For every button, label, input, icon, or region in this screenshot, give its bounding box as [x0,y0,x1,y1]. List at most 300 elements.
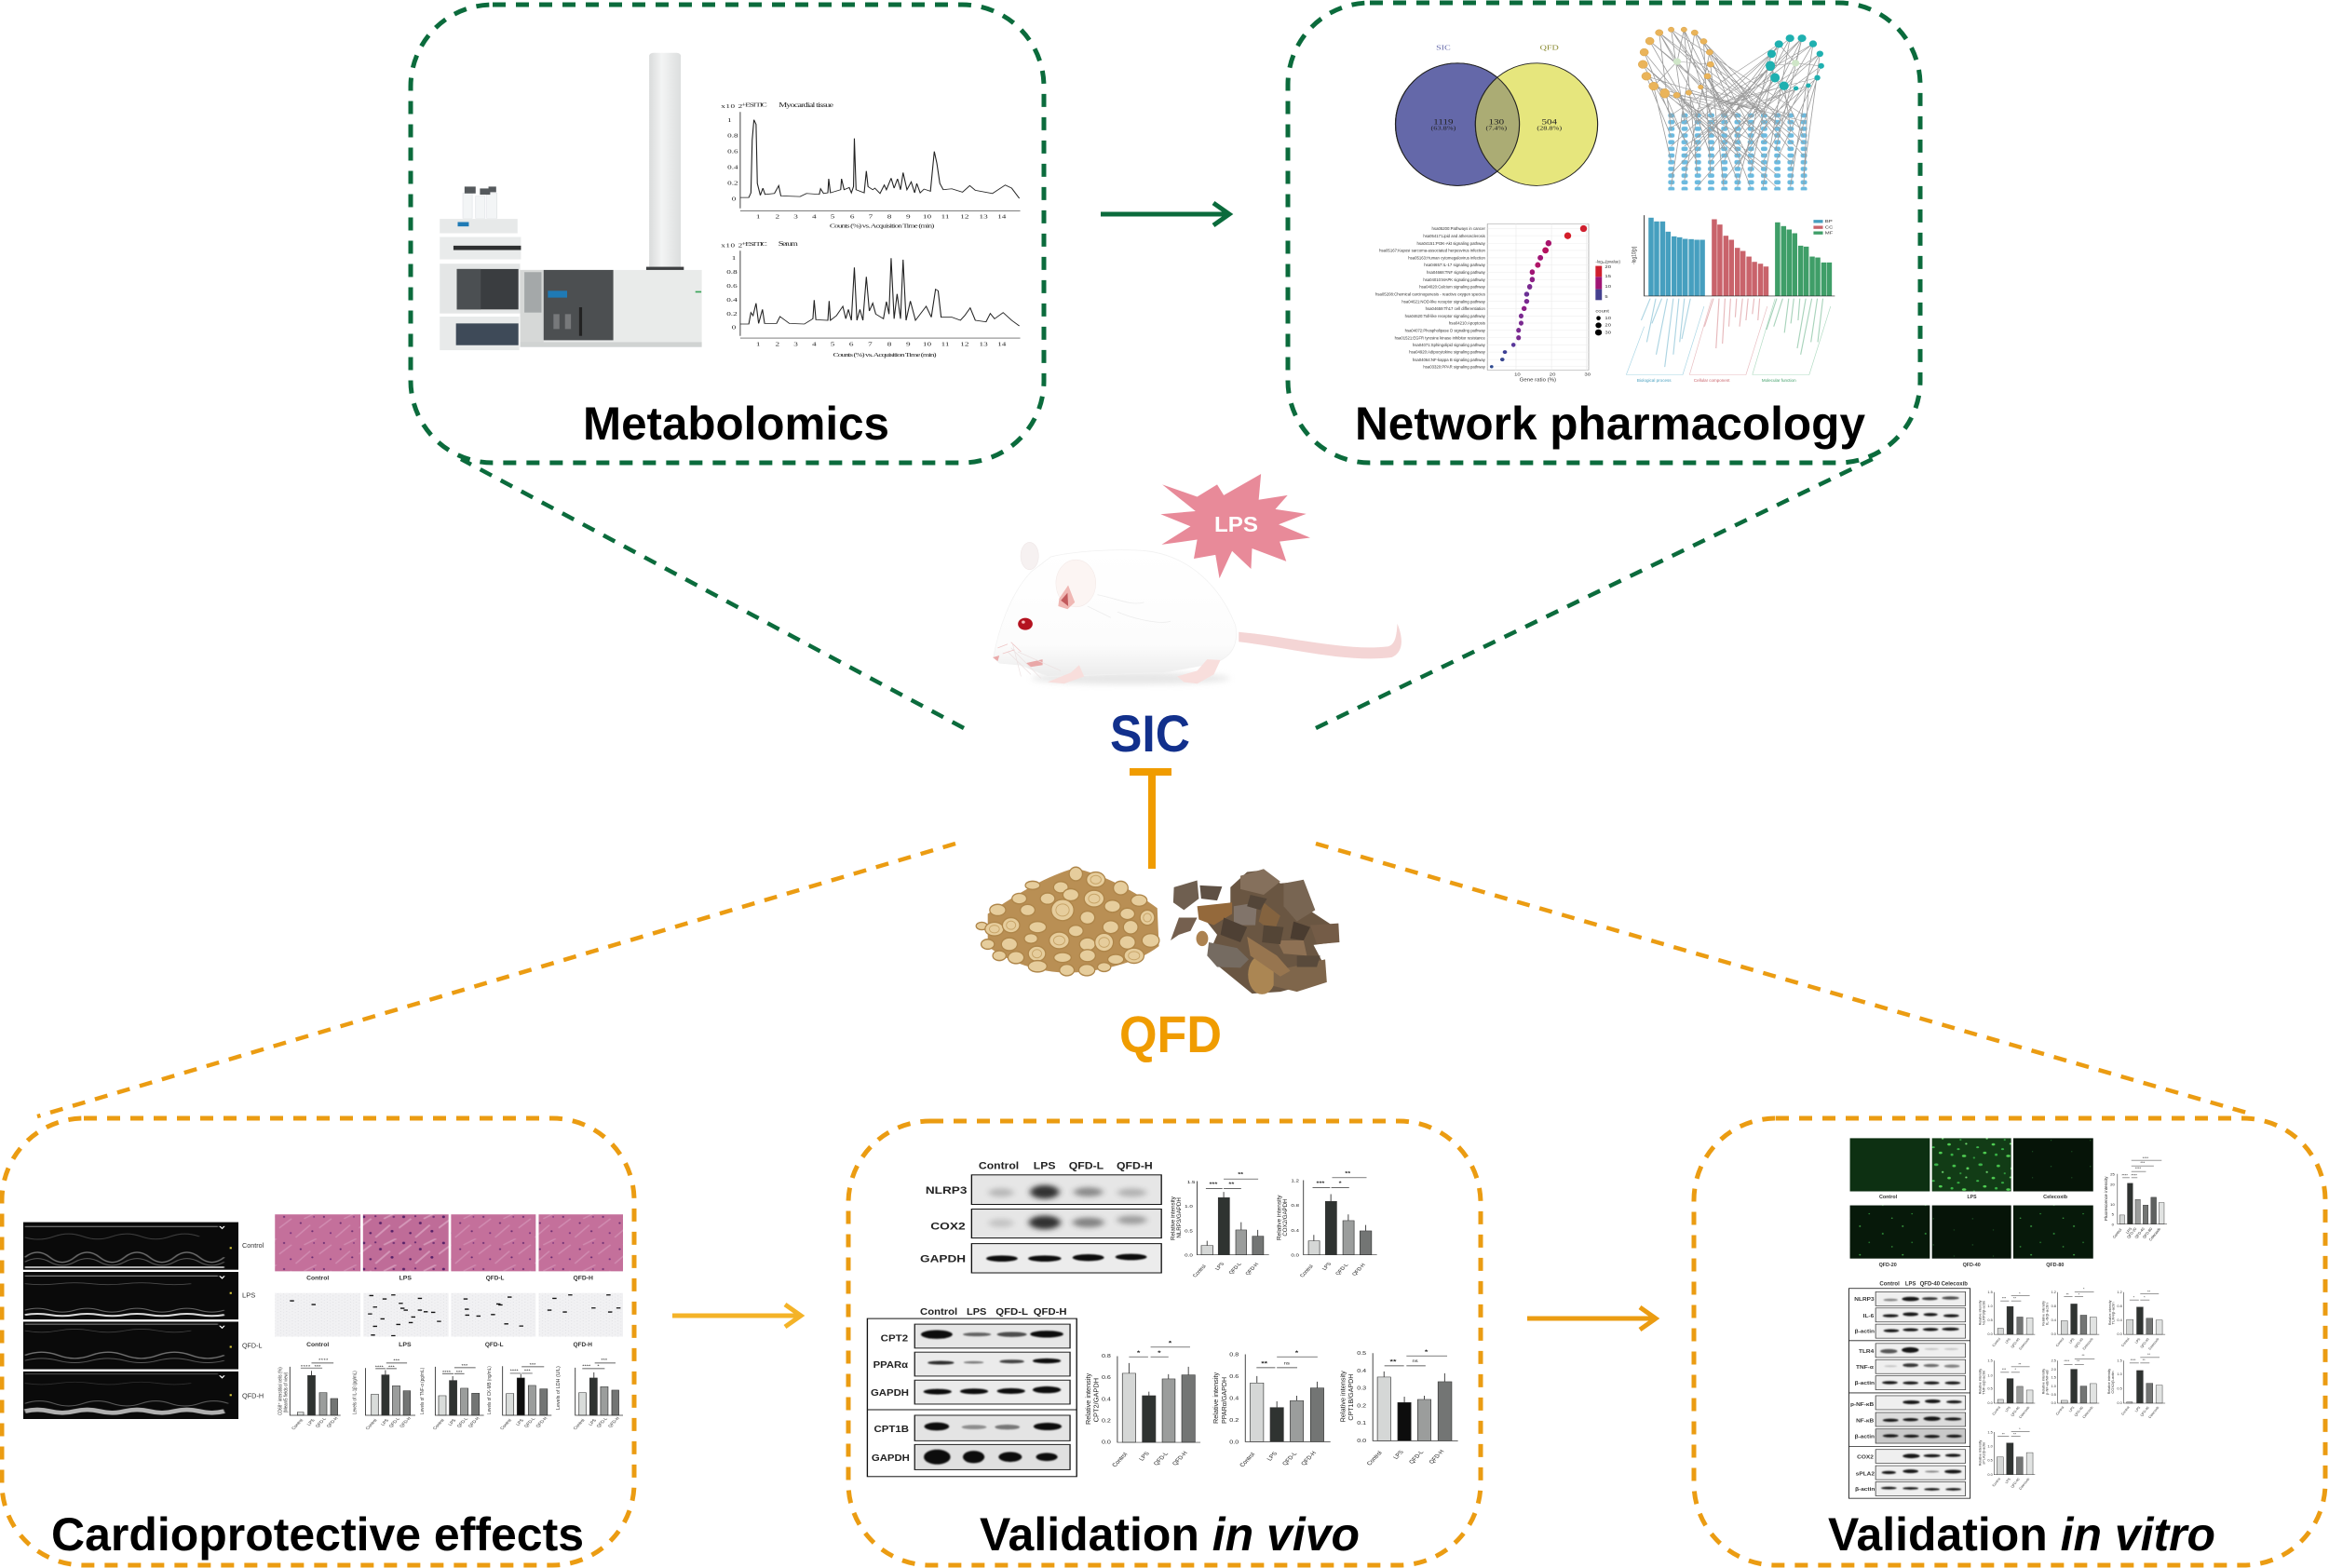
charts: in vitro protein quantification bars: 0.0 [2051,1332,2056,1336]
charts: cardiac injury bar charts: LPS [380,1418,390,1426]
chart: myocardial tissue chromatogram: 0.8 [727,132,738,139]
charts: cardiac injury bar charts: Control [364,1418,379,1431]
chart: serum chromatogram: 3 [793,341,798,347]
chart: fluorescence intensity bars: QFD-20 [2126,1226,2138,1239]
chart: serum chromatogram: 14 [997,341,1006,347]
charts: NLRP3 and COX2 bars: 0.0 [1291,1253,1299,1258]
charts: in vitro protein quantification bars: QFD-40 [2140,1406,2150,1417]
chart: Venn diagram: 504 [1542,118,1557,127]
charts: CPT2 PPAR CPT1B bars: QFD-H [1171,1451,1189,1467]
charts: in vitro protein quantification bars: 0.0 [1987,1401,1993,1405]
image: H&E staining panels: QFD-H [573,1275,593,1281]
charts: in vitro protein quantification bars: QFD-40 [2011,1406,2021,1417]
charts: in vitro protein quantification bars: COX2/β-actin [2111,1372,2115,1394]
chart: KEGG bubble plot: 10 [1605,285,1611,290]
arrow: in vivo to in vitro [1527,1307,1656,1330]
image: western blots CPT2 PPAR CPT1B GAPDH [867,1306,1076,1477]
charts: cardiac injury bar charts: **** [318,1358,329,1363]
charts: in vitro protein quantification bars: Relative intensity [2041,1369,2046,1394]
charts: CPT2 PPAR CPT1B bars: 0.0 [1357,1439,1367,1444]
chart: fluorescence intensity bars: 25 [2110,1172,2116,1176]
chart: fluorescence intensity bars: Control [2111,1227,2122,1239]
charts: cardiac injury bar charts: LPS [515,1418,525,1426]
image: H&E staining panels: LPS [399,1275,412,1281]
connector: orange dashed right [1316,844,2250,1114]
icon: dark herb pile [1171,869,1339,994]
chart: serum chromatogram: 12 [960,341,968,347]
charts: in vitro protein quantification bars: QFD-40 [2011,1338,2021,1348]
chart: fluorescence intensity bars: QFD-40 [2133,1226,2146,1239]
charts: CPT2 PPAR CPT1B bars: * [1158,1349,1162,1357]
charts: in vitro protein quantification bars: Control [2055,1405,2065,1416]
charts: in vitro protein quantification bars: Control [2120,1337,2131,1347]
charts: in vitro protein quantification bars: Relative intensity [1978,1369,1983,1394]
arrow: cardioprotective to in vivo [672,1304,801,1327]
charts: cardiac injury bar charts: Control [291,1418,305,1431]
charts: in vitro protein quantification bars: 0.0 [1987,1332,1993,1336]
charts: cardiac injury bar charts: Control [432,1418,446,1431]
charts: CPT2 PPAR CPT1B bars: QFD-L [1281,1451,1299,1467]
charts: NLRP3 and COX2 bars: QFD-L [1228,1262,1243,1276]
chart: fluorescence intensity bars: Celecoxib [2147,1226,2162,1241]
charts: CPT2 PPAR CPT1B bars: 0.6 [1229,1374,1239,1380]
image: fluorescence micrographs: Celecoxib [2043,1195,2068,1200]
image: western blots CPT2 PPAR CPT1B GAPDH: PPARα [873,1359,909,1370]
charts: CPT2 PPAR CPT1B bars: Control [1111,1452,1130,1468]
image: western blot stack: QFD-40 [1920,1281,1940,1287]
chart: Venn diagram: (28.8%) [1537,126,1563,131]
charts: NLRP3 and COX2 bars: *** [1209,1182,1218,1187]
charts: in vitro protein quantification bars: 0.4 [2117,1318,2122,1322]
charts: CPT2 PPAR CPT1B bars: ** [1389,1358,1397,1365]
chart: KEGG bubble plot: hsa05417:Lipid and atherosclerosis [1423,235,1485,239]
image: western blot stack: β-actin [1855,1434,1875,1440]
charts: cardiac injury bar charts: *** [601,1358,607,1363]
chart: myocardial tissue chromatogram: 14 [997,213,1006,220]
chart: KEGG bubble plot: hsa03320:PPAR signaling pathway [1423,365,1485,370]
charts: CPT2 PPAR CPT1B bars: QFD-H [1428,1449,1446,1465]
charts: in vitro protein quantification bars: Control [2120,1405,2131,1416]
charts: NLRP3 and COX2 bars: QFD-L [1334,1263,1350,1277]
charts: in vitro protein quantification bars: Celecoxib [2018,1478,2030,1491]
charts: cardiac injury bar charts: *** [456,1371,462,1375]
charts: in vitro protein quantification bars: 0.5 [1987,1318,1993,1322]
image: western blots NLRP3 COX2 GAPDH: QFD-L [1069,1159,1104,1171]
chart: myocardial tissue chromatogram: 10 [923,213,931,220]
chart: myocardial tissue chromatogram: 4 [812,213,817,220]
charts: CPT2 PPAR CPT1B bars: ns [1413,1359,1418,1364]
panel: Validation in vivo [848,1121,1481,1565]
chart: KEGG bubble plot: 20 [1550,372,1555,377]
icon: LC-MS instrument [440,53,702,350]
charts: in vitro protein quantification bars: ** [2066,1293,2069,1297]
chart: myocardial tissue chromatogram: 3 [793,213,798,220]
image: western blot stack: IL-6 [1863,1313,1875,1319]
charts: in vitro protein quantification bars: 1.5 [2117,1359,2122,1362]
icon: sliced herb pile [976,867,1159,976]
charts: cardiac injury bar charts: QFD-L [387,1416,401,1428]
image: western blots NLRP3 COX2 GAPDH: LPS [1034,1159,1056,1171]
chart: fluorescence intensity bars: 0 [2112,1223,2115,1226]
charts: in vitro protein quantification bars: **** [2064,1359,2070,1363]
charts: CPT2 PPAR CPT1B bars: 0.1 [1357,1421,1367,1426]
chart: myocardial tissue chromatogram: Counts (%) vs. Acquisition Time (min) [830,223,935,229]
chart: KEGG bubble plot: hsa04668:TNF signaling pathway [1427,271,1485,276]
chart: myocardial tissue chromatogram: 0.4 [727,164,738,170]
charts: cardiac injury bar charts: LPS [588,1418,598,1426]
chart: KEGG bubble plot: hsa05163:Human cytomegalovirus infection [1408,256,1485,261]
chart: GO enrichment bars: Molecular function [1762,379,1796,384]
charts: NLRP3 and COX2 bars: ** [1345,1171,1351,1177]
charts: in vitro protein quantification bars: ** [2013,1297,2017,1301]
charts: in vitro protein quantification bars: 2.5 [2051,1359,2056,1362]
charts: in vitro protein quantification bars: ** [2143,1358,2146,1362]
chart: myocardial tissue chromatogram: 0 [732,196,736,202]
charts: CPT2 PPAR CPT1B bars: LPS [1266,1451,1280,1462]
chart: KEGG bubble plot: count [1595,309,1610,314]
chart: serum chromatogram: 0.8 [726,268,738,276]
charts: in vitro protein quantification bars: 0.8 [2117,1304,2122,1308]
charts: cardiac injury bar charts: QFD-H [535,1416,549,1428]
charts: in vitro protein quantification bars: * [2015,1368,2017,1372]
chart: KEGG bubble plot: hsa04064:NF-kappa B signaling pathway [1413,358,1485,362]
charts: cardiac injury bar charts: LPS [306,1418,317,1426]
charts: in vitro protein quantification bars: 1.0 [2051,1385,2056,1388]
charts: in vitro protein quantification bars: * [2019,1427,2021,1431]
charts: CPT2 PPAR CPT1B bars: 0.8 [1229,1352,1239,1358]
chart: myocardial tissue chromatogram: 8 [887,213,891,220]
chart: KEGG bubble plot: 10 [1514,372,1521,377]
chart: serum chromatogram: 0 [732,324,736,331]
image: western blot stack [1848,1281,1970,1498]
charts: in vitro protein quantification bars: Control [2055,1337,2065,1347]
chart: KEGG bubble plot: hsa04621:NOD-like receptor signaling pathway [1401,300,1485,304]
chart: KEGG bubble plot: hsa04072:Phospholipase D signaling pathway [1405,329,1485,333]
chart: myocardial tissue chromatogram [721,101,1021,229]
chart: myocardial tissue chromatogram: 11 [941,213,949,220]
charts: in vitro protein quantification bars: ** [2002,1433,2005,1436]
charts: NLRP3 and COX2 bars: Relative intensity [1171,1196,1177,1240]
charts: in vitro protein quantification bars: Relative intensity [2107,1369,2111,1394]
image: western blot stack: β-actin [1855,1381,1875,1386]
charts: in vitro protein quantification bars: 1.0 [2117,1372,2122,1376]
charts: in vitro protein quantification bars: Control [1992,1337,2001,1347]
charts: NLRP3 and COX2 bars [1171,1171,1377,1278]
chart: myocardial tissue chromatogram: 5 [831,213,834,220]
charts: NLRP3 and COX2 bars: ** [1238,1172,1244,1178]
chart: KEGG bubble plot: hsa04151:PI3K-Akt signaling pathway [1416,242,1485,247]
charts: in vitro protein quantification bars: Celecoxib [2018,1406,2030,1419]
chart: KEGG bubble plot: hsa04010:MAPK signaling pathway [1423,278,1485,283]
charts: cardiac injury bar charts: LPS [447,1418,458,1426]
charts: in vitro protein quantification bars: 1.2 [2051,1291,2056,1294]
charts: in vitro protein quantification bars: QFD-40 [2074,1338,2084,1348]
charts: in vitro protein quantification bars: 2.0 [2051,1368,2056,1372]
charts: NLRP3 and COX2 bars: 0.0 [1185,1253,1193,1258]
image: western blots NLRP3 COX2 GAPDH: COX2 [930,1220,966,1232]
charts: CPT2 PPAR CPT1B bars: ns [1284,1361,1290,1366]
charts: cardiac injury bar charts: QFD-L [314,1416,328,1428]
chart: Venn diagram: (63.8%) [1431,126,1456,131]
chart: KEGG bubble plot [1375,223,1620,383]
charts: in vitro protein quantification bars: ** [2082,1354,2085,1358]
heading: Metabolomics: Metabolomics [583,398,889,450]
chart: myocardial tissue chromatogram: 6 [850,213,854,220]
charts: in vitro protein quantification bars: * [2133,1296,2135,1299]
charts: NLRP3 and COX2 bars: QFD-H [1245,1263,1261,1277]
charts: cardiac injury bar charts: QFD-L [595,1416,609,1428]
chart: myocardial tissue chromatogram: 0.6 [727,148,738,155]
chart: fluorescence intensity bars: Fluorescence intensity [2104,1176,2108,1221]
chart: serum chromatogram: 8 [887,341,891,347]
chart: myocardial tissue chromatogram: 12 [960,213,968,220]
chart: KEGG bubble plot: hsa04020:Calcium signaling pathway [1419,285,1485,290]
image: western blots CPT2 PPAR CPT1B GAPDH: QFD-H [1034,1306,1066,1318]
charts: cardiac injury bar charts: *** [393,1358,399,1363]
chart: serum chromatogram: 2 [776,341,779,347]
charts: in vitro protein quantification bars: Celecoxib [2147,1406,2160,1419]
chart: KEGG bubble plot: hsa05167:Kaposi sarcoma-associated herpesvirus infection [1379,249,1485,253]
charts: in vitro protein quantification bars: 1.0 [1987,1304,1993,1308]
charts: CPT2 PPAR CPT1B bars: 0.5 [1357,1351,1367,1357]
panel: Metabolomics [411,5,1044,463]
chart: KEGG bubble plot: 5 [1605,295,1608,300]
charts: CPT2 PPAR CPT1B bars: QFD-H [1300,1451,1319,1467]
image: western blots NLRP3 COX2 GAPDH: QFD-H [1117,1159,1153,1171]
charts: CPT2 PPAR CPT1B bars: 0.6 [1102,1375,1111,1381]
charts: CPT2 PPAR CPT1B bars: QFD-L [1153,1451,1171,1467]
image: echocardiography strips [23,1223,264,1419]
charts: NLRP3 and COX2 bars: 1.0 [1185,1204,1193,1210]
charts: in vitro protein quantification bars: Celecoxib [2018,1337,2030,1350]
chart: serum chromatogram: 4 [812,341,817,347]
chart: KEGG bubble plot: 30 [1584,372,1591,377]
charts: NLRP3 and COX2 bars: QFD-H [1351,1263,1367,1277]
charts: cardiac injury bar charts: *** [388,1365,395,1370]
charts: in vitro protein quantification bars: 0.8 [2051,1304,2056,1308]
chart: Venn diagram: 130 [1489,118,1504,127]
icon: LPS starburst [1160,474,1310,578]
panel: Cardioprotective effects [2,1118,634,1565]
charts: in vitro protein quantification bars: LPS [2134,1405,2142,1413]
image: western blot stack: Celecoxib [1942,1281,1968,1287]
chart: GO enrichment bars: Biological process [1637,379,1672,384]
chart: myocardial tissue chromatogram: 7 [869,213,873,220]
charts: cardiac injury bar charts: * [597,1364,600,1369]
charts: NLRP3 and COX2 bars: NLRP3/GAPDH [1177,1197,1183,1238]
chart: KEGG bubble plot: hsa04920:Adipocytokine signaling pathway [1409,350,1485,355]
chart: GO enrichment bars: -log10(p) [1632,246,1638,264]
chart: myocardial tissue chromatogram: +ESI TIC [741,101,767,108]
image: fluorescence micrographs: LPS [1968,1195,1977,1200]
chart: myocardial tissue chromatogram: 0.2 [727,180,738,186]
chart: serum chromatogram: 1 [756,341,760,347]
chart: KEGG bubble plot: Gene ratio (%) [1520,377,1556,383]
chart: myocardial tissue chromatogram: 9 [906,213,911,220]
image: immunohistochemistry panels: QFD-H [573,1341,592,1348]
chart: KEGG bubble plot: hsa04071:Sphingolipid signaling pathway [1413,344,1485,348]
charts: CPT2 PPAR CPT1B bars: 0.2 [1229,1418,1239,1424]
image: immunohistochemistry panels: Control [306,1341,329,1348]
charts: cardiac injury bar charts: Levels of CK-MB (ng/mL) [487,1366,493,1414]
charts: CPT2 PPAR CPT1B bars: * [1169,1340,1172,1346]
chart: serum chromatogram: 7 [868,341,873,347]
image: western blots CPT2 PPAR CPT1B GAPDH: GAPDH [872,1453,910,1464]
charts: in vitro protein quantification bars: 0.5 [1987,1387,1993,1391]
charts: in vitro protein quantification bars: 1.2 [2117,1291,2122,1294]
charts: NLRP3 and COX2 bars: 1.2 [1291,1179,1299,1183]
chart: GO enrichment bars: Cellular component [1694,379,1730,384]
chart: serum chromatogram: 10 [923,341,931,347]
charts: in vitro protein quantification bars: 1.5 [2051,1376,2056,1380]
charts: CPT2 PPAR CPT1B bars: CPT2/GAPDH [1093,1377,1101,1422]
image: western blot stack: p-NF-κB [1850,1401,1875,1408]
charts: cardiac injury bar charts: Control [499,1418,513,1431]
chart: Venn diagram: SIC [1436,44,1451,51]
connector: green dashed right [1316,455,1880,728]
charts: in vitro protein quantification bars: 1.5 [1987,1359,1993,1362]
chart: serum chromatogram [721,239,1021,358]
charts: cardiac injury bar charts: *** [315,1364,320,1370]
charts: CPT2 PPAR CPT1B bars: Relative intensity [1340,1370,1347,1422]
charts: in vitro protein quantification bars: 1.5 [1987,1291,1993,1294]
charts: in vitro protein quantification bars: Celecoxib [2082,1337,2094,1350]
charts: NLRP3 and COX2 bars: * [1339,1181,1342,1186]
chart: fluorescence intensity bars: 5 [2112,1212,2115,1216]
image: western blot stack: sPLA2 [1856,1471,1875,1477]
charts: CPT2 PPAR CPT1B bars: LPS [1392,1450,1405,1460]
image: western blots CPT2 PPAR CPT1B GAPDH: CPT2 [881,1332,909,1344]
charts: NLRP3 and COX2 bars: Relative intensity [1277,1195,1283,1240]
chart: fluorescence intensity bars [2104,1156,2167,1241]
image: western blot stack: COX2 [1857,1454,1874,1461]
chart: GO enrichment bars: MF [1825,231,1833,236]
chart: myocardial tissue chromatogram: Myocardial tissue [779,101,833,109]
chart: serum chromatogram: 1 [732,254,736,262]
chart: KEGG bubble plot: 30 [1605,331,1611,335]
charts: CPT2 PPAR CPT1B bars: ** [1261,1360,1268,1367]
chart: compound-target network [1638,27,1824,190]
chart: fluorescence intensity bars: 20 [2110,1183,2116,1186]
charts: in vitro protein quantification bars: **** [2131,1358,2136,1362]
charts: in vitro protein quantification bars: QFD-40 [2011,1478,2021,1489]
image: H&E staining panels: QFD-L [486,1275,505,1281]
charts: in vitro protein quantification bars: LPS [2004,1405,2011,1413]
charts: CPT2 PPAR CPT1B bars [1085,1340,1458,1468]
chart: fluorescence intensity bars: **** [2143,1156,2149,1160]
charts: in vitro protein quantification bars: * [2019,1292,2021,1295]
charts: cardiac injury bar charts: Levels of TNF-α (pg/mL) [419,1367,426,1414]
image: western blot stack: NF-κB [1856,1418,1875,1425]
charts: in vitro protein quantification bars [1978,1288,2165,1491]
chart: fluorescence intensity bars: *** [2140,1160,2146,1165]
image: western blots NLRP3 COX2 GAPDH: Control [979,1159,1019,1171]
image: echocardiography strips: Control [242,1241,264,1250]
icon: white mouse [993,542,1401,684]
charts: CPT2 PPAR CPT1B bars: 0.4 [1357,1369,1367,1374]
chart: KEGG bubble plot: hsa04620:Toll-like receptor signaling pathway [1405,315,1485,319]
charts: in vitro protein quantification bars: ** [2147,1353,2151,1357]
image: western blot stack: TLR4 [1859,1349,1875,1355]
charts: cardiac injury bar charts: *** [524,1369,531,1373]
image: western blot stack: TNF-α [1856,1364,1874,1371]
chart: serum chromatogram: 9 [906,341,911,347]
image: echocardiography strips: QFD-L [242,1342,263,1349]
charts: in vitro protein quantification bars: 0.0 [2117,1332,2122,1336]
chart: KEGG bubble plot: 10 [1605,317,1611,321]
image: western blots CPT2 PPAR CPT1B GAPDH: Control [920,1306,957,1318]
charts: cardiac injury bar charts: **** [442,1371,451,1375]
charts: in vitro protein quantification bars: LPS [2004,1477,2011,1484]
charts: cardiac injury bar charts: *** [462,1364,467,1369]
charts: CPT2 PPAR CPT1B bars: QFD-L [1408,1450,1426,1465]
image: western blots CPT2 PPAR CPT1B GAPDH: GAPDH [871,1387,909,1398]
charts: NLRP3 and COX2 bars: Control [1192,1264,1208,1278]
charts: NLRP3 and COX2 bars: 1.5 [1187,1180,1195,1185]
charts: CPT2 PPAR CPT1B bars: 0.3 [1357,1386,1367,1391]
heading: Network pharmacology: Network pharmacology [1355,398,1865,450]
charts: NLRP3 and COX2 bars: ** [1228,1182,1235,1187]
image: western blot stack: β-actin [1855,1487,1875,1493]
chart: KEGG bubble plot: hsa05200:Pathways in cancer [1432,227,1485,232]
chart: serum chromatogram: 5 [831,341,834,347]
image: echocardiography strips: QFD-H [242,1392,264,1399]
charts: CPT2 PPAR CPT1B bars: Control [1239,1452,1257,1468]
charts: cardiac injury bar charts: QFD-H [467,1416,481,1428]
chart: myocardial tissue chromatogram: x10 2 [721,102,742,110]
charts: in vitro protein quantification bars: 1.0 [1987,1374,1993,1378]
image: western blots NLRP3 COX2 GAPDH: NLRP3 [926,1184,967,1196]
charts: NLRP3 and COX2 bars: Control [1299,1264,1315,1278]
charts: in vitro protein quantification bars: 0.5 [2051,1393,2056,1397]
chart: KEGG bubble plot: hsa04210:Apoptosis [1449,321,1485,326]
charts: NLRP3 and COX2 bars: 0.8 [1291,1204,1299,1209]
chart: serum chromatogram: +ESI TIC [741,240,767,248]
image: western blots NLRP3 COX2 GAPDH [920,1159,1161,1273]
chart: myocardial tissue chromatogram: 1 [727,116,732,124]
chart: fluorescence intensity bars: **** [2131,1173,2137,1177]
label: SIC: SIC [1110,704,1190,763]
charts: in vitro protein quantification bars: LPS [2134,1337,2142,1345]
charts: in vitro protein quantification bars: ** [2013,1433,2017,1436]
image: western blots CPT2 PPAR CPT1B GAPDH: CPT1B [874,1424,909,1435]
charts: CPT2 PPAR CPT1B bars: CPT1B/GAPDH [1348,1373,1355,1421]
image: fluorescence micrographs: QFD-80 [2046,1263,2064,1268]
label: QFD: QFD [1119,1005,1222,1063]
image: fluorescence micrographs: Control [1879,1195,1898,1200]
charts: CPT2 PPAR CPT1B bars: Control [1365,1451,1384,1467]
charts: NLRP3 and COX2 bars: LPS [1214,1262,1226,1271]
charts: CPT2 PPAR CPT1B bars: 0.0 [1102,1440,1111,1445]
panel: Validation in vitro [1694,1118,2325,1565]
charts: CPT2 PPAR CPT1B bars: LPS [1138,1451,1151,1462]
chart: serum chromatogram: x10 2 [721,242,742,249]
chart: Venn diagram: QFD [1540,44,1560,51]
image: immunohistochemistry panels [275,1293,623,1348]
charts: CPT2 PPAR CPT1B bars: Relative intensity [1085,1372,1092,1425]
charts: CPT2 PPAR CPT1B bars: * [1137,1349,1141,1357]
charts: cardiac injury bar charts: QFD-H [399,1416,413,1428]
charts: in vitro protein quantification bars: sPLA2/β-actin [1982,1442,1985,1465]
charts: in vitro protein quantification bars: *** [2002,1368,2007,1372]
charts: cardiac injury bar charts: **** [301,1364,311,1370]
charts: cardiac injury bar charts: **** [582,1364,590,1369]
chart: GO enrichment bars: CC [1825,225,1834,230]
charts: in vitro protein quantification bars: 0.0 [2051,1401,2056,1405]
charts: NLRP3 and COX2 bars: 0.4 [1291,1229,1299,1234]
charts: cardiac injury bar charts: QFD-H [326,1416,340,1428]
charts: in vitro protein quantification bars: ** [2018,1363,2022,1366]
